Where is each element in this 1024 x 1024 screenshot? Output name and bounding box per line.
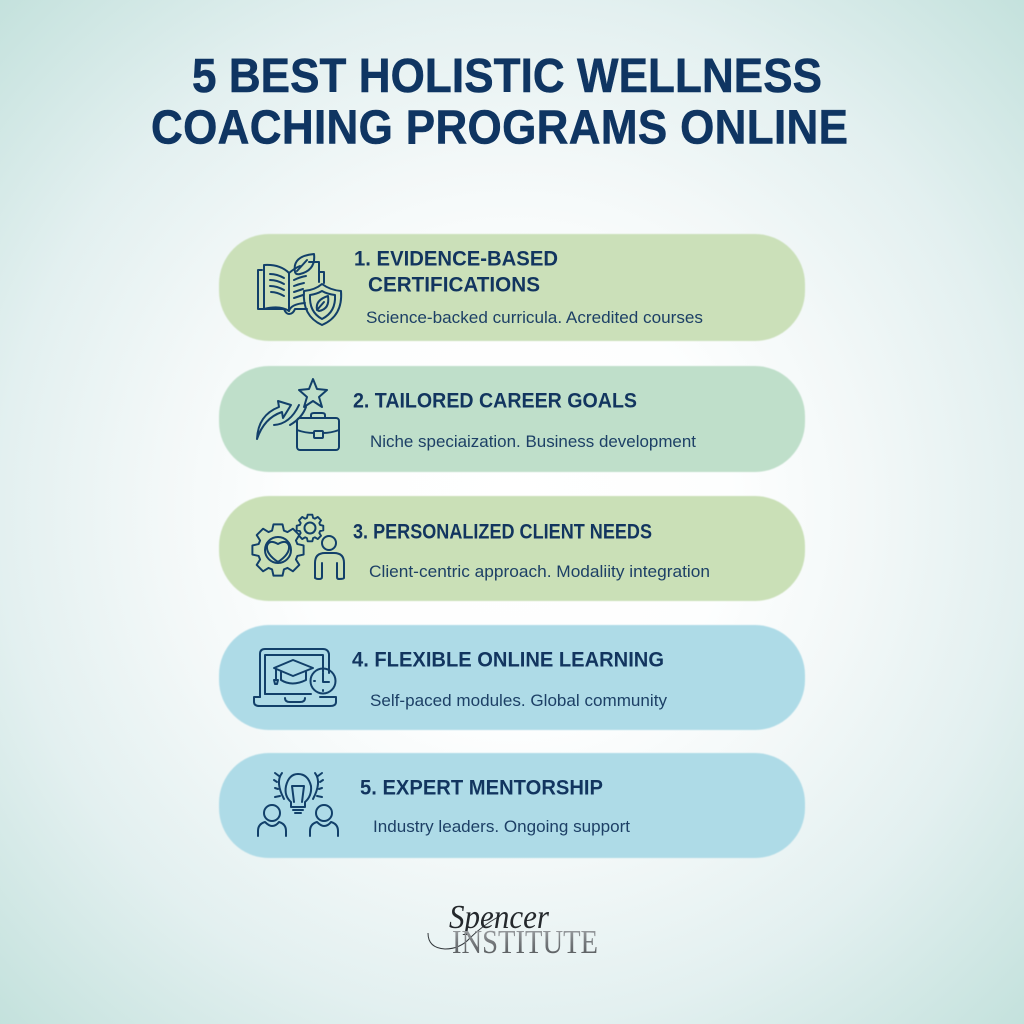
icon: arrow star briefcase	[257, 379, 339, 450]
heading: 1. EVIDENCE-BASED	[354, 247, 558, 271]
panel: 3 personalized client needs	[219, 496, 805, 601]
logo: Spencer Institute	[428, 899, 598, 961]
icon: gears heart person	[252, 515, 344, 579]
text block: Client-centric approach. Modaliity integration	[369, 563, 710, 581]
heading: 3. PERSONALIZED CLIENT NEEDS	[353, 520, 652, 544]
heading: 4. FLEXIBLE ONLINE LEARNING	[352, 648, 664, 672]
icon: lightbulb laurels mentors	[258, 773, 338, 836]
heading: 5. EXPERT MENTORSHIP	[360, 776, 603, 800]
text block: Self-paced modules. Global community	[370, 692, 668, 710]
icon: laptop cap clock	[254, 649, 336, 706]
title: COACHING PROGRAMS ONLINE	[151, 100, 848, 154]
panel: 2 tailored career goals	[219, 366, 805, 472]
panel: 5 expert mentorship	[219, 753, 805, 858]
icon: book with leaf and shield	[258, 254, 341, 325]
panel: 4 flexible online learning	[219, 625, 805, 730]
text block: Science-backed curricula. Acredited courses	[366, 309, 703, 327]
panel: 1 evidence-based certifications	[219, 234, 805, 341]
logo: Spencer Institute: Spencer	[449, 899, 550, 936]
title	[151, 48, 848, 154]
logo: Spencer Institute: INSTITUTE	[452, 924, 598, 961]
text block: Industry leaders. Ongoing support	[373, 818, 630, 836]
panel: 1 evidence-based certifications: CERTIFICATIONS	[368, 273, 540, 297]
title: 5 BEST HOLISTIC WELLNESS	[192, 48, 822, 102]
heading: 2. TAILORED CAREER GOALS	[353, 389, 637, 413]
text block: Niche speciaization. Business development	[370, 433, 696, 451]
